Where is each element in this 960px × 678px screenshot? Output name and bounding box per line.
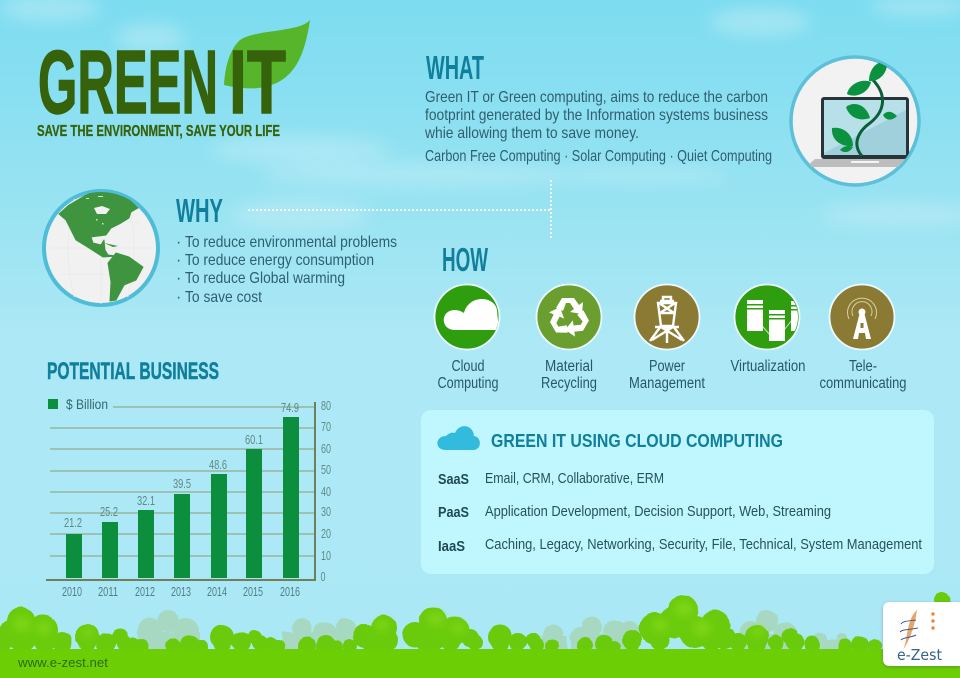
- website address: www.e-zest.net: [17, 655, 108, 670]
- why list: To reduce energy consumption: [185, 252, 374, 269]
- bar values: 25.2: [100, 504, 118, 519]
- why list: ·: [176, 234, 181, 251]
- bar chart: [46, 396, 331, 599]
- how labels: Cloud: [452, 358, 484, 375]
- why list: ·: [176, 270, 181, 287]
- heading: how: HOW: [442, 241, 488, 278]
- green foreground trees: [0, 592, 950, 655]
- title: IT: [229, 33, 286, 133]
- x axis years: [62, 584, 300, 599]
- what description: footprint generated by the Information systems business: [425, 107, 768, 124]
- what topics: Carbon Free Computing · Solar Computing · Quiet Computing: [425, 148, 772, 165]
- ground: [0, 649, 960, 678]
- row: paas: PaaS: [438, 504, 469, 521]
- icon: material recycling: [536, 284, 602, 350]
- row: paas: Application Development, Decision Support, Web, Streaming: [485, 503, 831, 520]
- y axis values: 60: [321, 441, 331, 456]
- icon: virtualization: [734, 284, 807, 350]
- icon: leaf behind title: [224, 20, 310, 88]
- row: saas: Email, CRM, Collaborative, ERM: [485, 470, 664, 487]
- bar values: 74.9: [281, 400, 299, 415]
- icon: globe: [44, 190, 158, 306]
- legend: $ Billion: [66, 396, 108, 412]
- row: saas: SaaS: [438, 471, 469, 488]
- heading: potential business: POTENTIAL BUSINESS: [47, 358, 219, 385]
- icon: cloud: [437, 426, 480, 450]
- x axis years: 2013: [171, 584, 191, 599]
- x axis years: 2012: [135, 584, 155, 599]
- how labels: Recycling: [541, 375, 597, 392]
- what description: [424, 89, 768, 142]
- row: saas: [438, 470, 664, 488]
- why list: To reduce environmental problems: [185, 234, 397, 251]
- dotted connector: [248, 180, 551, 240]
- x axis years: 2016: [280, 584, 300, 599]
- panel heading: GREEN IT USING CLOUD COMPUTING: [491, 431, 783, 451]
- why list: To reduce Global warming: [185, 270, 345, 287]
- what description: Green IT or Green computing, aims to reduce the carbon: [425, 89, 768, 106]
- pale background trees: [137, 610, 849, 650]
- why list: ·: [176, 289, 181, 306]
- bar values: 60.1: [245, 432, 263, 447]
- background clouds: [0, 0, 960, 231]
- bar values: 21.2: [64, 515, 82, 530]
- legend: [48, 396, 108, 412]
- how labels: Computing: [438, 375, 498, 392]
- what description: whie allowing them to save money.: [424, 125, 639, 142]
- heading: what: WHAT: [426, 49, 484, 86]
- bar values: 39.5: [173, 476, 191, 491]
- y axis values: 40: [321, 484, 331, 499]
- icon: laptop with plant: [791, 57, 920, 185]
- title: GREEN: [38, 33, 218, 133]
- x axis years: 2011: [98, 584, 118, 599]
- x axis years: 2014: [207, 584, 227, 599]
- how labels: Material: [545, 358, 593, 375]
- bar values: 48.6: [209, 457, 227, 472]
- heading: why: WHY: [176, 192, 223, 229]
- why list: To save cost: [185, 289, 262, 306]
- row: iaas: IaaS: [438, 538, 465, 555]
- logo: e-zest: e-Zest: [897, 646, 942, 664]
- how labels: Virtualization: [730, 358, 806, 375]
- why list: ·: [176, 252, 181, 269]
- logo: e-zest: [883, 602, 960, 666]
- icon: cloud computing: [434, 284, 500, 350]
- how labels: communicating: [820, 375, 906, 392]
- how labels: Power: [649, 358, 685, 375]
- x axis years: 2010: [62, 584, 82, 599]
- y axis values: 50: [321, 462, 331, 477]
- x axis years: 2015: [243, 584, 263, 599]
- y axis values: [320, 398, 331, 584]
- how labels: Tele-: [849, 358, 877, 375]
- bar values: [64, 400, 299, 530]
- tree highlights: [13, 601, 765, 638]
- bars: [66, 417, 299, 578]
- why list: [176, 234, 397, 306]
- bar values: 32.1: [137, 493, 155, 508]
- y axis values: 0: [320, 569, 326, 584]
- y axis values: 20: [321, 526, 331, 541]
- how labels: [438, 358, 906, 392]
- how labels: Management: [629, 375, 706, 392]
- icon: telecommunicating: [830, 284, 894, 350]
- y axis values: 80: [321, 398, 331, 413]
- panel: green it using cloud computing: [421, 410, 934, 574]
- tagline: SAVE THE ENVIRONMENT, SAVE YOUR LIFE: [37, 123, 280, 140]
- y axis values: 70: [321, 419, 331, 434]
- icon: power management: [634, 284, 700, 350]
- y axis values: 10: [321, 548, 331, 563]
- y axis values: 30: [321, 504, 331, 519]
